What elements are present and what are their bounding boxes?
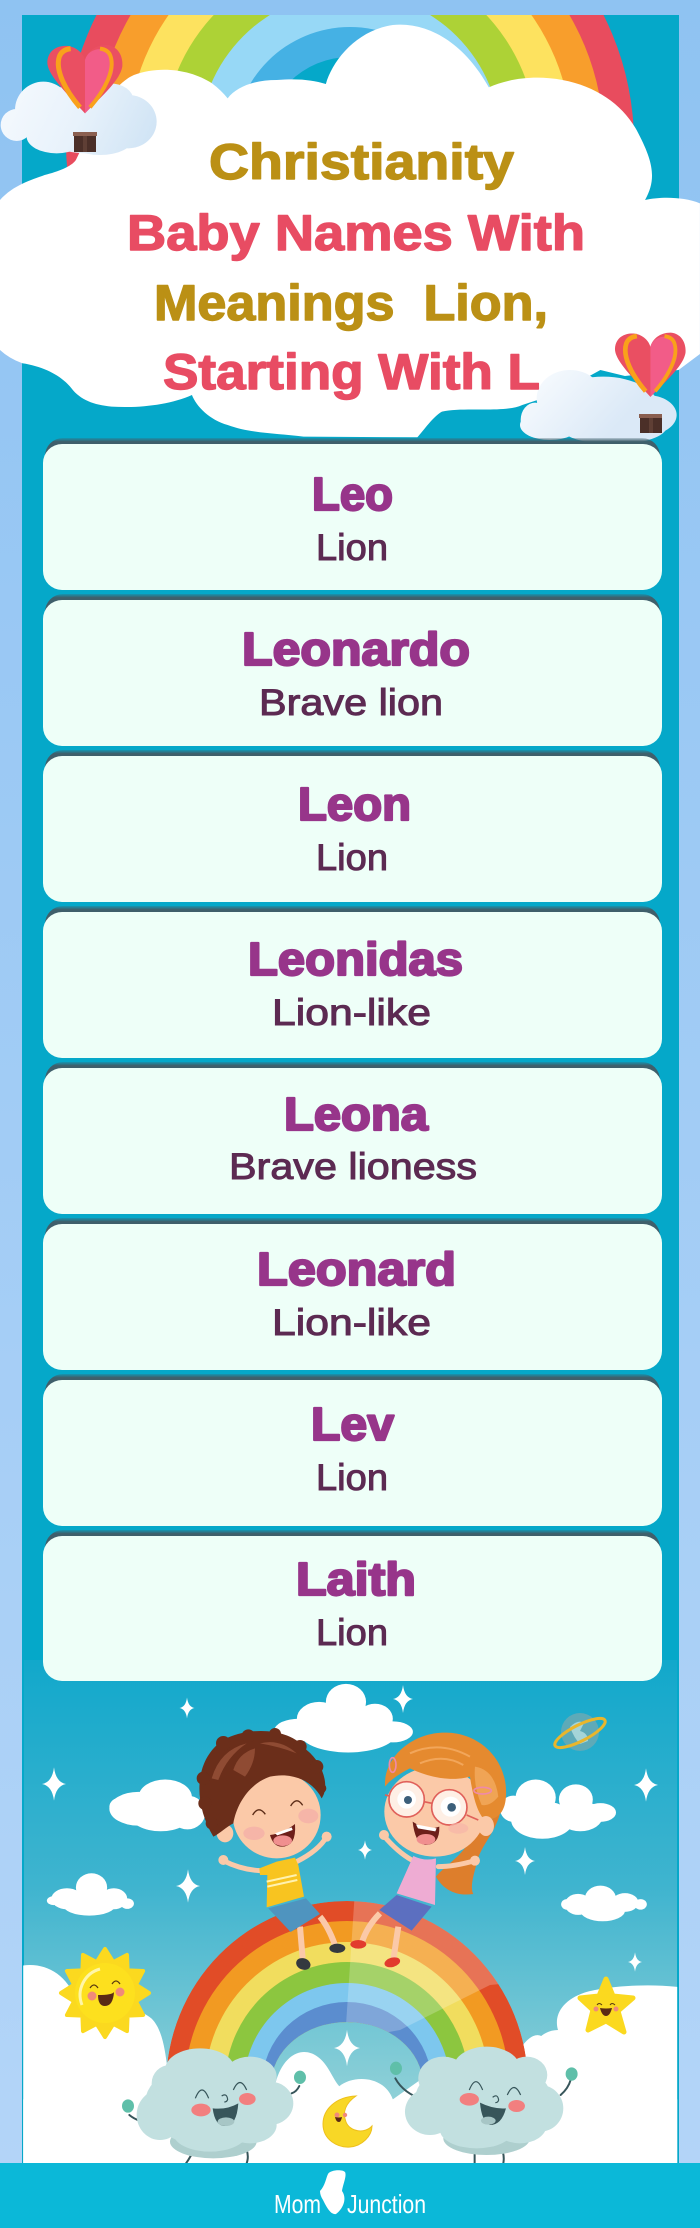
boy hair: [197, 1728, 326, 1837]
girl top: [397, 1856, 436, 1905]
card 8: Laith: [43, 1530, 662, 1681]
cloud hands: [122, 2071, 306, 2113]
card 1: Leo: Lion: [316, 527, 388, 568]
boy legs and shoes: [294, 1917, 345, 1972]
cloud hands: [390, 2062, 578, 2081]
footer logo: Mom: [274, 2189, 321, 2219]
illustration: kids on rainbow: [23, 1660, 678, 2163]
girl glasses and eyes: [385, 1782, 478, 1825]
boy shirt: [259, 1858, 304, 1907]
cloud underside: [170, 2138, 256, 2158]
star character: [580, 1979, 633, 2032]
girl legs and shoes: [350, 1913, 401, 1969]
basket: [73, 132, 97, 152]
card 8: Laith: Laith: [296, 1553, 416, 1605]
ground clouds: [23, 1965, 677, 2165]
card 3: Leon: Leon: [298, 778, 411, 830]
card 7: Lev: Lion: [316, 1457, 388, 1498]
cloud body: [405, 2047, 563, 2148]
title cloud: [0, 25, 700, 437]
card 5: Leona: Leona: [284, 1088, 428, 1140]
cloud body: [137, 2048, 293, 2152]
title: Christianity: [209, 134, 514, 190]
girl back hair: [436, 1813, 500, 1895]
heart balloon: [615, 333, 686, 397]
cloud face: [460, 2082, 525, 2125]
boy arms: [223, 1837, 327, 1871]
small cloud behind left balloon: [1, 82, 157, 155]
rainbow at top: [66, 0, 634, 427]
rainbow: [168, 1901, 526, 2070]
cloud arms and legs: [129, 2086, 299, 2163]
girl mouth: [413, 1822, 468, 1845]
boy: [197, 1728, 345, 1972]
card 4: Leonidas: Lion-like: [272, 992, 431, 1033]
hot air balloon: top left: [1, 45, 157, 155]
girl arms: [384, 1836, 475, 1867]
footer logo: Junction: [347, 2189, 426, 2219]
card 4: Leonidas: [43, 906, 662, 1058]
card 6: Leonard: Leonard: [257, 1243, 456, 1295]
sky: [24, 1660, 677, 2100]
card 5: Leona: Brave lioness: [229, 1146, 477, 1187]
card 3: Leon: Lion: [316, 837, 388, 878]
planet: [551, 1713, 609, 1753]
sky streaks: [22, 1666, 674, 1970]
girl hair: [385, 1733, 506, 1820]
card 2: Leonardo: Leonardo: [242, 623, 470, 675]
card 7: Lev: Lev: [311, 1398, 394, 1450]
card 3: Leon: [43, 750, 662, 902]
left cloud character: [122, 2048, 306, 2163]
card 1: Leo: [43, 438, 662, 590]
title: Meanings Lion,: [154, 275, 548, 331]
girl skirt: [379, 1895, 432, 1931]
boy head: [233, 1772, 321, 1858]
title: Baby Names With: [127, 205, 585, 261]
card 6: Leonard: [43, 1218, 662, 1370]
sun: [61, 1949, 149, 2037]
footer bar: [0, 2163, 700, 2228]
cloud underside: [443, 2122, 530, 2155]
girl head: [384, 1767, 486, 1857]
card 8: Laith: Lion: [316, 1612, 388, 1653]
title: [127, 134, 585, 400]
basket: [639, 414, 662, 433]
cloud face: [191, 2082, 256, 2126]
heart balloon: [47, 45, 122, 113]
card 4: Leonidas: Leonidas: [248, 933, 463, 985]
boy shorts: [268, 1898, 320, 1932]
card 6: Leonard: Lion-like: [272, 1302, 431, 1343]
hot air balloon: right: [520, 333, 686, 444]
cloud arms and legs: [395, 2078, 571, 2163]
boy face: [243, 1801, 318, 1847]
small cloud behind right balloon: [520, 370, 677, 444]
card 7: Lev: [43, 1374, 662, 1526]
card 5: Leona: [43, 1062, 662, 1214]
girl ear: [480, 1816, 494, 1836]
title: Starting With L: [163, 344, 540, 400]
right cloud character: [390, 2047, 578, 2163]
card 2: Leonardo: Brave lion: [259, 682, 443, 723]
footer logo: [274, 2170, 426, 2219]
sparkle stars: [42, 1685, 658, 2066]
card 2: Leonardo: [43, 594, 662, 746]
girl: [350, 1733, 506, 1969]
moon character: [323, 2096, 372, 2147]
card 1: Leo: Leo: [312, 468, 393, 520]
sky clouds: [47, 1684, 647, 1921]
